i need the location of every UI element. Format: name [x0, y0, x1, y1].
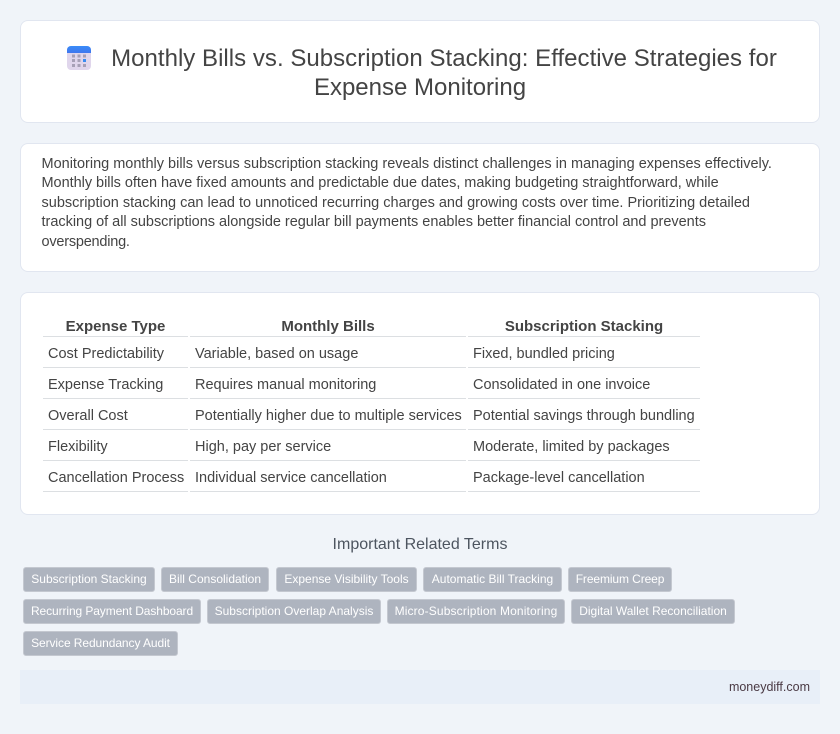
- tag: Digital Wallet Reconciliation: [579, 604, 727, 618]
- row: cancellation process: Cancellation Process: [48, 470, 184, 486]
- row: flexibility: High, pay per service: [195, 439, 331, 455]
- row: cost predictability: Variable, based on usage: [195, 346, 358, 362]
- table header: expense type: Expense Type: [66, 318, 165, 335]
- tag: [423, 567, 562, 592]
- tag: [23, 567, 155, 592]
- text block: intro paragraph: Monitoring monthly bills versus subscription stacking reveals distinct challenges in managing expenses effectively.: [42, 156, 772, 172]
- row: overall cost: [48, 408, 695, 424]
- text block: intro paragraph: overspending.: [42, 234, 130, 250]
- table header: monthly bills: Monthly Bills: [281, 318, 375, 335]
- tag: [387, 599, 565, 624]
- tag list: related terms: [23, 567, 735, 656]
- row: cost predictability: Fixed, bundled pricing: [473, 346, 615, 362]
- row: cancellation process: Package-level cancellation: [473, 470, 645, 486]
- tag: [571, 599, 735, 624]
- title: Monthly Bills vs. Subscription Stacking: Effective Strategies for: [111, 45, 777, 72]
- tag: Subscription Overlap Analysis: [215, 604, 373, 618]
- table header: subscription stacking: Subscription Stacking: [505, 318, 663, 335]
- tag: Automatic Bill Tracking: [432, 572, 553, 586]
- footer source text: moneydiff.com: [729, 680, 810, 694]
- tag: Recurring Payment Dashboard: [31, 604, 193, 618]
- tag: [161, 567, 269, 592]
- tag: [568, 567, 672, 592]
- row: flexibility: Flexibility: [48, 439, 108, 455]
- icon: calendar: [67, 46, 91, 70]
- panel: header: [20, 20, 820, 123]
- row: cancellation process: Individual service cancellation: [195, 470, 387, 486]
- row: overall cost: Overall Cost: [48, 408, 128, 424]
- text block: intro paragraph: Monthly bills often have fixed amounts and predictable due dates, making budgeting straightforward, while: [42, 175, 719, 191]
- panel: comparison table: [20, 292, 820, 515]
- tag: [23, 631, 178, 656]
- row: expense tracking: Expense Tracking: [48, 377, 163, 393]
- text block: intro paragraph: [42, 156, 772, 250]
- row: cancellation process: [48, 470, 645, 486]
- row: expense tracking: Consolidated in one invoice: [473, 377, 650, 393]
- row: expense tracking: Requires manual monitoring: [195, 377, 376, 393]
- tag: Service Redundancy Audit: [31, 636, 170, 650]
- tag: Subscription Stacking: [31, 572, 147, 586]
- tag: Bill Consolidation: [169, 572, 261, 586]
- row: cost predictability: Cost Predictability: [48, 346, 164, 362]
- panel: intro text: [20, 143, 820, 272]
- tag: [207, 599, 381, 624]
- text block: intro paragraph: tracking of all subscriptions alongside regular bill payments enables better financial control and prevents: [42, 214, 706, 230]
- tag: Expense Visibility Tools: [284, 572, 409, 586]
- footer bar: [20, 670, 820, 704]
- tag: Micro-Subscription Monitoring: [395, 604, 557, 618]
- title: [111, 45, 777, 101]
- tag: [23, 599, 201, 624]
- row: overall cost: Potential savings through bundling: [473, 408, 695, 424]
- text block: intro paragraph: subscription stacking can lead to unnoticed recurring charges and growing costs over time. Prioritizing detailed: [42, 194, 750, 210]
- tag: [276, 567, 417, 592]
- row: expense tracking: [48, 377, 650, 393]
- row: cost predictability: [48, 346, 615, 362]
- title: Expense Monitoring: [314, 74, 526, 101]
- row: flexibility: Moderate, limited by packages: [473, 439, 670, 455]
- tag: Freemium Creep: [576, 572, 664, 586]
- row: overall cost: Potentially higher due to multiple services: [195, 408, 462, 424]
- heading: related terms: Important Related Terms: [333, 536, 507, 553]
- row: flexibility: [48, 439, 670, 455]
